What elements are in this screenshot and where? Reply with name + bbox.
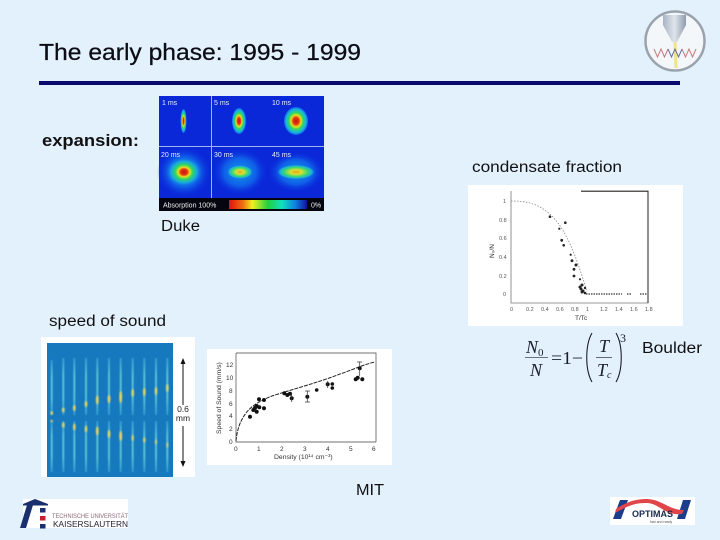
logo: TU Kaiserslautern: KAISERSLAUTERN: [53, 519, 128, 529]
x tick labels: 0: [510, 307, 513, 313]
label: speed of sound: speed of sound: [49, 313, 166, 330]
theory curve: [511, 201, 587, 292]
y tick labels: 2: [280, 446, 284, 453]
panel: Duke absorption images: Absorption 100%: [163, 202, 216, 210]
y tick labels: 0.2: [526, 307, 534, 313]
panel: Duke absorption images: 0%: [311, 202, 321, 210]
formula: condensate fraction: T: [597, 360, 607, 380]
time labels: 45 ms: [272, 152, 292, 159]
y tick labels: 1: [586, 307, 589, 313]
cloud: 20 ms: [166, 157, 202, 187]
formula: condensate fraction: c: [607, 370, 612, 381]
y tick labels: 0.4: [499, 255, 507, 261]
cloud: 45 ms: [277, 164, 315, 180]
y tick labels: 0.2: [499, 274, 507, 280]
sound pulses: [50, 384, 168, 448]
x tick labels: 0: [234, 446, 238, 453]
strips: [51, 358, 168, 472]
cloud: 10 ms: [284, 107, 308, 135]
y tick labels: 1.8: [645, 307, 653, 313]
chart: speed of sound vs density: [207, 349, 392, 465]
y tick labels: 0: [503, 292, 506, 298]
label: condensate fraction: condensate fraction: [472, 159, 622, 176]
y tick labels: 10: [226, 375, 234, 382]
panel: MIT absorption strips: [41, 337, 195, 477]
label: expansion: expansion:: [42, 131, 139, 150]
y tick labels: 12: [226, 362, 234, 369]
y tick labels: 8: [229, 388, 233, 395]
time labels: 30 ms: [214, 152, 234, 159]
formula: condensate fraction: 3: [620, 331, 626, 345]
cloud: 30 ms halo: [213, 149, 267, 195]
formula: condensate fraction: N: [526, 337, 538, 357]
axes: [236, 353, 376, 442]
cloud: 1 ms: [180, 109, 186, 133]
y tick labels: 0.6: [556, 307, 564, 313]
y tick labels: [499, 199, 653, 313]
y tick labels: 5: [349, 446, 353, 453]
logo: OPTIMAS: fast and ready: [650, 520, 672, 524]
y tick labels: 1.6: [630, 307, 638, 313]
y tick labels: 1.4: [615, 307, 623, 313]
label: Boulder: Boulder: [642, 340, 702, 357]
formula: condensate fraction: [525, 331, 626, 382]
logo: TU Kaiserslautern: TECHNISCHE UNIVERSITÄT: [52, 512, 128, 520]
baseline points: [586, 293, 648, 295]
cloud: 30 ms: [227, 165, 253, 179]
axes: [511, 191, 648, 303]
formula: condensate fraction: =1−: [551, 348, 583, 368]
theory curve: [236, 362, 375, 441]
y tick labels: 2: [229, 426, 233, 433]
y tick labels: 3: [303, 446, 307, 453]
y tick labels: 6: [372, 446, 376, 453]
logo: OPTIMAS: [610, 497, 695, 525]
panel: MIT absorption strips: mm: [176, 413, 190, 423]
y axis title: N₀/N: [489, 244, 496, 258]
y tick labels: 0.8: [571, 307, 579, 313]
x axis title: T/Tc: [575, 315, 588, 322]
scale label: 0.6: [177, 404, 189, 414]
label: MIT: MIT: [356, 482, 385, 499]
y tick labels: 4: [229, 413, 233, 420]
time labels: 5 ms: [214, 100, 230, 107]
time labels: [161, 100, 292, 159]
y tick labels: 0.4: [541, 307, 549, 313]
cloud: 45 ms halo: [268, 152, 324, 192]
y tick labels: [226, 362, 376, 453]
colour scale: [159, 198, 324, 211]
label: Duke: Duke: [161, 218, 200, 235]
y tick labels: 1: [257, 446, 261, 453]
y tick labels: 1: [503, 199, 506, 205]
icon: tip and standing wave logo: [646, 12, 704, 70]
title rule: [39, 81, 680, 85]
title: The early phase: 1995 - 1999: [39, 39, 361, 65]
y tick labels: 4: [326, 446, 330, 453]
x axis title: Density (10¹⁴ cm⁻³): [274, 454, 333, 461]
formula: condensate fraction: N: [529, 360, 543, 380]
cloud: 20 ms halo: [157, 147, 211, 197]
time labels: 10 ms: [272, 100, 292, 107]
logo: TU Kaiserslautern: [20, 499, 128, 529]
formula: condensate fraction: T: [599, 336, 611, 356]
y tick labels: 6: [229, 401, 233, 408]
data points: [248, 366, 364, 419]
logo: OPTIMAS: OPTIMAS: [632, 509, 673, 520]
y tick labels: 0.8: [499, 218, 507, 224]
error bars: [292, 362, 362, 402]
formula: condensate fraction: 0: [538, 347, 544, 359]
panel: Duke absorption images: [157, 96, 324, 211]
time labels: 1 ms: [162, 100, 178, 107]
y axis title: Speed of Sound (mm/s): [216, 362, 223, 434]
cloud: 5 ms: [232, 108, 246, 134]
panel dividers: [159, 96, 324, 198]
y tick labels: 0.6: [499, 236, 507, 242]
data points: [549, 215, 586, 294]
y tick labels: 1.2: [600, 307, 608, 313]
scale arrow: [182, 362, 184, 463]
y tick labels: 0: [229, 439, 233, 446]
time labels: 20 ms: [161, 152, 181, 159]
chart: condensate fraction vs temperature: [468, 185, 683, 326]
